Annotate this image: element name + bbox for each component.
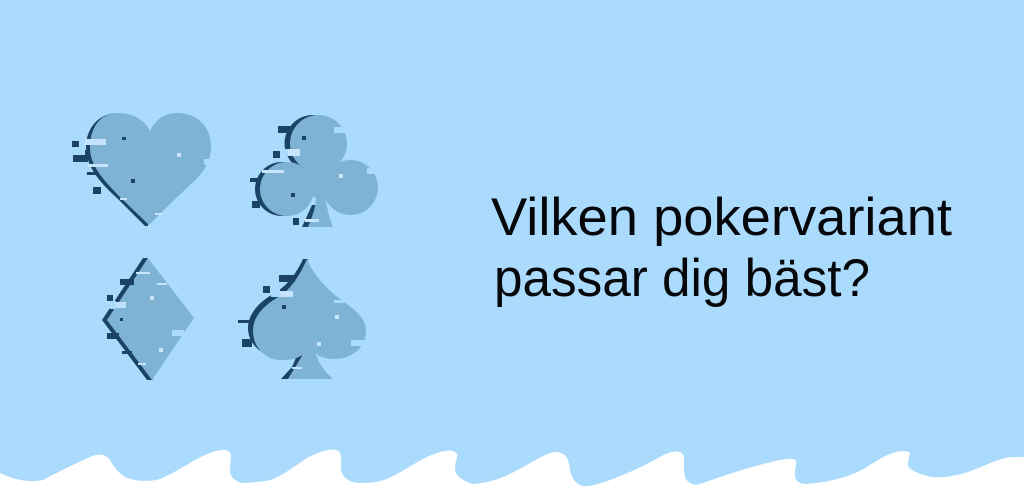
icon: club suit bbox=[250, 115, 379, 227]
icon: heart suit bbox=[72, 113, 212, 226]
icon: diamond suit bbox=[102, 258, 194, 380]
heading: passar dig bäst? bbox=[494, 249, 870, 308]
icon: spade suit bbox=[238, 259, 367, 379]
heading bbox=[491, 188, 952, 308]
heading: Vilken pokervariant bbox=[491, 188, 952, 247]
